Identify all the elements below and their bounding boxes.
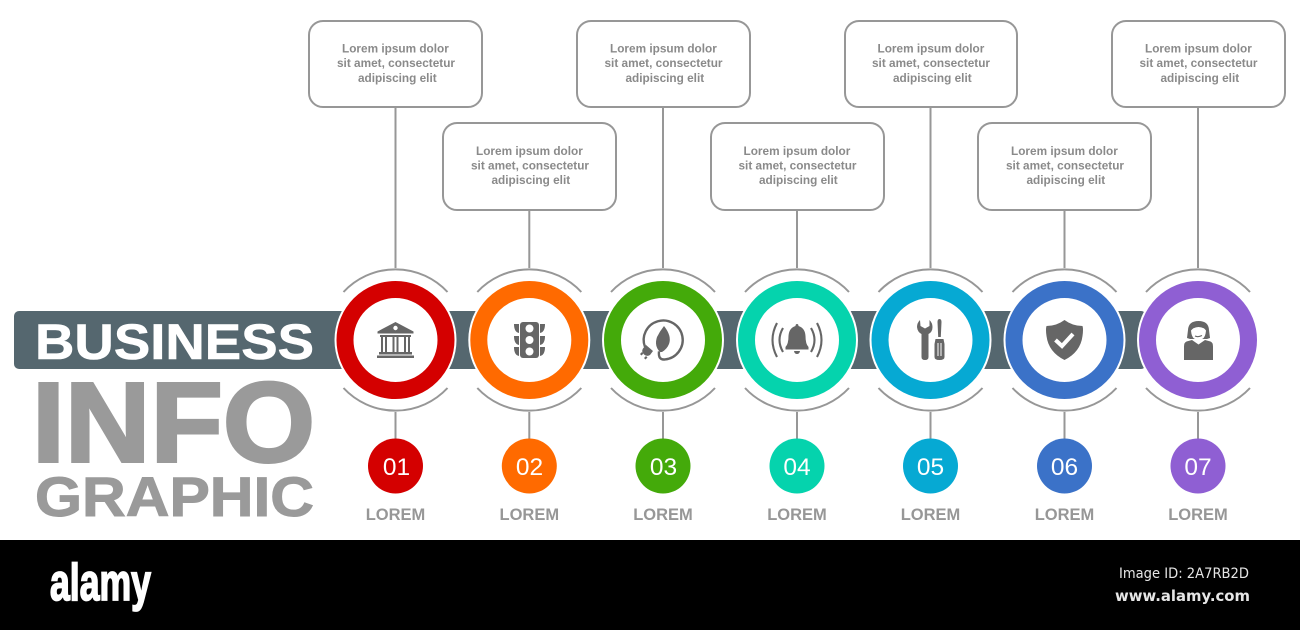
callout box 3: sit amet, consectetur	[604, 56, 723, 70]
number badge 7: 07	[1184, 454, 1212, 481]
arcs 2	[477, 269, 581, 411]
callout box 4: sit amet, consectetur	[738, 158, 857, 172]
footer strip	[0, 540, 1300, 630]
callout box 6: sit amet, consectetur	[1006, 158, 1124, 172]
callout box 4: adipiscing elit	[759, 173, 838, 187]
step 6	[978, 123, 1151, 524]
callout box 5	[845, 21, 1017, 107]
callout box 6	[978, 123, 1151, 210]
callout box 4	[711, 123, 884, 210]
callout box 6: Lorem ipsum dolor	[1011, 144, 1118, 158]
icon: alarm bell	[772, 323, 822, 357]
label 1: LOREM	[366, 506, 425, 524]
callout box 1: adipiscing elit	[358, 71, 437, 85]
callout box 5: sit amet, consectetur	[872, 56, 990, 70]
ring 2	[468, 279, 590, 401]
callout box 2: adipiscing elit	[492, 173, 570, 187]
label 3: LOREM	[633, 506, 693, 524]
callout box 7	[1112, 21, 1285, 107]
callout box 1: Lorem ipsum dolor	[342, 42, 449, 56]
ring 3	[602, 279, 724, 401]
callout box 2	[443, 123, 616, 210]
footer url: www.alamy.com	[1115, 587, 1250, 605]
icon: leaf plug	[640, 320, 683, 360]
icon: wrench and screwdriver	[917, 319, 944, 360]
callout box 4: Lorem ipsum dolor	[744, 144, 851, 158]
arcs 4	[745, 269, 849, 411]
number badge 6: 06	[1051, 454, 1078, 481]
label 4: LOREM	[767, 506, 827, 524]
step 7	[1112, 21, 1285, 524]
number badge 6	[1037, 438, 1092, 494]
icon: shield check	[1046, 320, 1083, 360]
ring 7	[1137, 279, 1259, 401]
icon: traffic light	[514, 322, 545, 358]
callout box 7: adipiscing elit	[1160, 71, 1239, 85]
ring 4	[736, 279, 858, 401]
arcs 5	[878, 269, 982, 411]
callout box 2: Lorem ipsum dolor	[476, 144, 583, 158]
icon: support woman	[1184, 321, 1213, 360]
step 4	[711, 123, 884, 524]
number badge 7	[1170, 438, 1226, 494]
number badge 1: 01	[383, 454, 410, 481]
callout box 6: adipiscing elit	[1026, 173, 1105, 187]
arcs 7	[1146, 269, 1250, 411]
footer image id: Image ID: 2A7RB2D	[1119, 566, 1249, 582]
number badge 3: 03	[650, 454, 677, 481]
number badge 5	[903, 438, 958, 494]
number badge 3	[636, 438, 690, 494]
step 3	[577, 21, 750, 524]
number badge 4: 04	[783, 454, 811, 481]
title: GRAPHIC: GRAPHIC	[35, 465, 314, 528]
ring 5	[870, 279, 992, 401]
callout box 5: adipiscing elit	[893, 71, 972, 85]
arcs 6	[1012, 269, 1116, 411]
number badge 2: 02	[516, 454, 543, 481]
number badge 1	[368, 438, 423, 494]
arcs 1	[344, 269, 448, 411]
label 5: LOREM	[901, 506, 960, 524]
title: INFO: INFO	[32, 360, 315, 486]
callout box 1	[309, 21, 482, 107]
number badge 5: 05	[917, 454, 944, 481]
ring 6	[1004, 279, 1126, 401]
step 2	[443, 123, 616, 524]
callout box 2: sit amet, consectetur	[471, 158, 589, 172]
callout box 7: Lorem ipsum dolor	[1145, 42, 1252, 56]
callout box 3	[577, 21, 750, 107]
title banner bar	[14, 311, 1146, 369]
callout box 1: sit amet, consectetur	[337, 56, 455, 70]
title: BUSINESS: BUSINESS	[35, 314, 314, 370]
number badge 2	[502, 438, 557, 494]
number badge 4	[770, 438, 824, 494]
icon: bank	[377, 322, 414, 358]
step 5	[845, 21, 1017, 524]
label 6: LOREM	[1035, 506, 1094, 524]
callout box 5: Lorem ipsum dolor	[878, 42, 985, 56]
callout box 7: sit amet, consectetur	[1140, 56, 1258, 70]
label 7: LOREM	[1168, 506, 1228, 524]
callout box 3: Lorem ipsum dolor	[610, 42, 717, 56]
arcs 3	[611, 269, 715, 411]
step 1	[309, 21, 482, 524]
footer logo: alamy	[50, 554, 151, 612]
callout box 3: adipiscing elit	[626, 71, 704, 85]
ring 1	[334, 279, 456, 401]
label 2: LOREM	[500, 506, 559, 524]
